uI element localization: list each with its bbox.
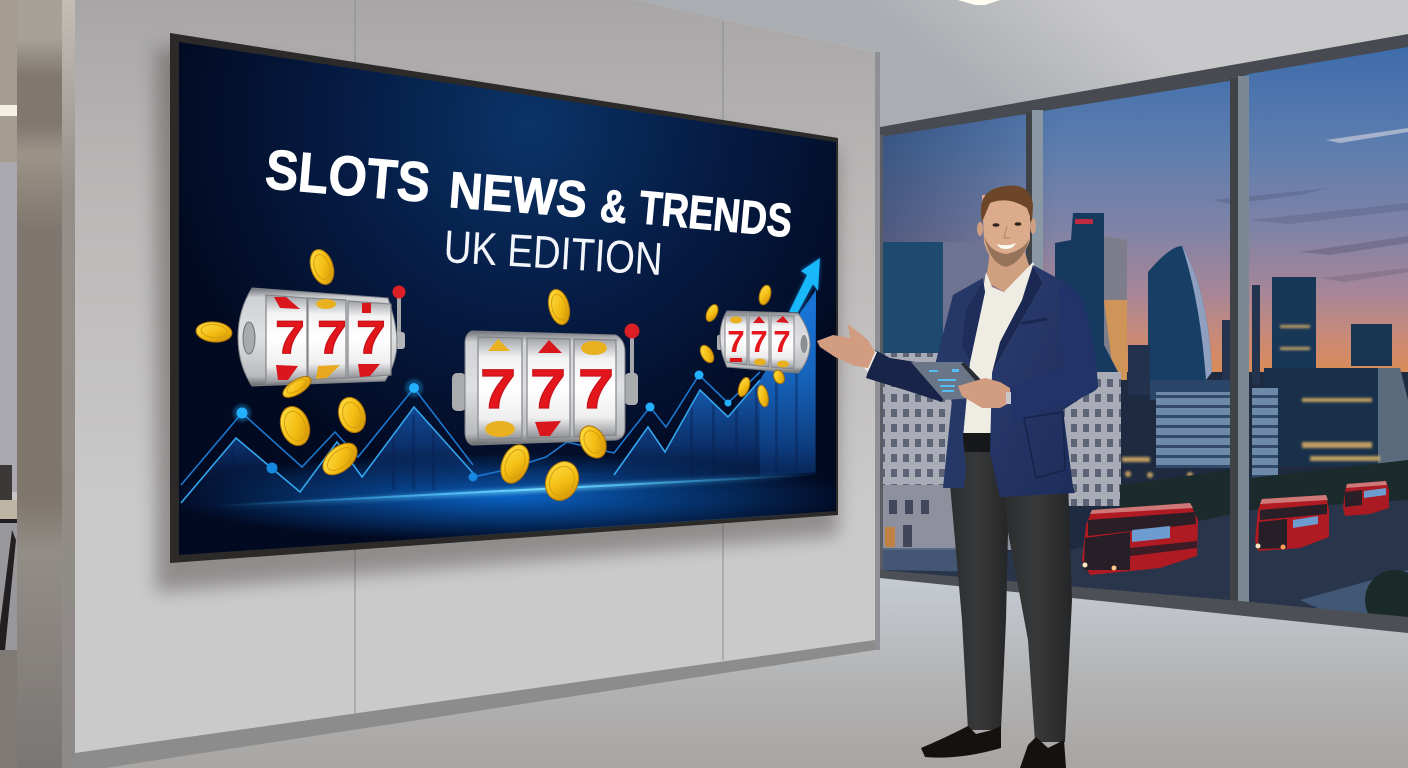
- building lights: [1122, 325, 1380, 478]
- slot machine: centre: [452, 324, 640, 445]
- skyline buildings: [883, 213, 1408, 550]
- wall panels: [75, 0, 880, 768]
- clouds: [1212, 128, 1408, 282]
- slot machine: right: [717, 311, 810, 373]
- glowing base line: [223, 474, 804, 508]
- chart area: [196, 301, 815, 488]
- bus 1: [1082, 503, 1198, 575]
- screen shadow: [156, 46, 838, 592]
- slot machine: centre: 7: [480, 357, 516, 420]
- slot machine: right: 7: [773, 324, 791, 359]
- watch: [1006, 392, 1011, 404]
- slot machine: centre: 7: [578, 357, 614, 420]
- bus 3: [1343, 481, 1389, 516]
- jacket: [935, 265, 1098, 497]
- slot machine: left: 7: [317, 311, 347, 363]
- subtitle: UK EDITION: [442, 220, 664, 285]
- ceiling light: [958, 0, 1000, 5]
- nose: [1004, 226, 1010, 238]
- window frame: [880, 34, 1408, 633]
- bus 2: [1255, 495, 1329, 551]
- trees: [1120, 460, 1408, 520]
- slot machine: centre: 7: [530, 357, 566, 420]
- arrow up: [789, 258, 820, 314]
- holding hand: [958, 378, 1011, 408]
- title: NEWS: [447, 161, 589, 228]
- right rising bars: [760, 290, 816, 476]
- presenter: [817, 185, 1098, 768]
- right shoe: [1020, 737, 1066, 768]
- floor: [75, 575, 1408, 768]
- holding arm: [1009, 285, 1098, 421]
- eyes: [992, 222, 1022, 227]
- rising line chart: [170, 290, 850, 541]
- head: [977, 185, 1036, 267]
- chart nodes: [233, 370, 732, 482]
- title: SLOTS: [263, 137, 433, 214]
- chart bars: [232, 373, 798, 490]
- title: &: [598, 179, 629, 233]
- slot machine: left: 7: [275, 311, 305, 363]
- lower city mass: [880, 372, 1408, 562]
- screen display: [179, 42, 836, 555]
- smile: [997, 243, 1016, 249]
- screen bezel: [170, 33, 838, 563]
- road: [883, 500, 1408, 614]
- metal pillar: [17, 0, 75, 768]
- wall screen: [170, 33, 850, 563]
- pointing arm: [866, 350, 950, 402]
- left room edge: [0, 0, 17, 768]
- ceiling: [634, 0, 1408, 127]
- shirt: [963, 262, 1043, 437]
- title: [263, 137, 794, 247]
- city view through window: [880, 30, 1408, 640]
- base glow: [188, 456, 833, 538]
- roadside tree: [1365, 570, 1408, 617]
- right trouser leg: [1000, 450, 1072, 742]
- neck: [986, 250, 1030, 292]
- shirt cuff: [864, 350, 877, 372]
- beard shadow: [984, 236, 1030, 267]
- slot machine: left: [238, 286, 406, 386]
- left shoe: [921, 726, 1001, 758]
- left trouser leg: [947, 450, 1008, 730]
- slot machine: right: 7: [727, 324, 745, 359]
- slot machine: left: 7: [356, 311, 386, 363]
- pointing hand: [817, 324, 875, 368]
- slot machine: right: 7: [750, 324, 768, 359]
- title: TRENDS: [637, 180, 794, 247]
- tablet: [911, 362, 984, 400]
- hair: [981, 185, 1033, 222]
- gold coins: [195, 246, 786, 506]
- belt: [960, 433, 992, 452]
- chart lines: [181, 372, 760, 503]
